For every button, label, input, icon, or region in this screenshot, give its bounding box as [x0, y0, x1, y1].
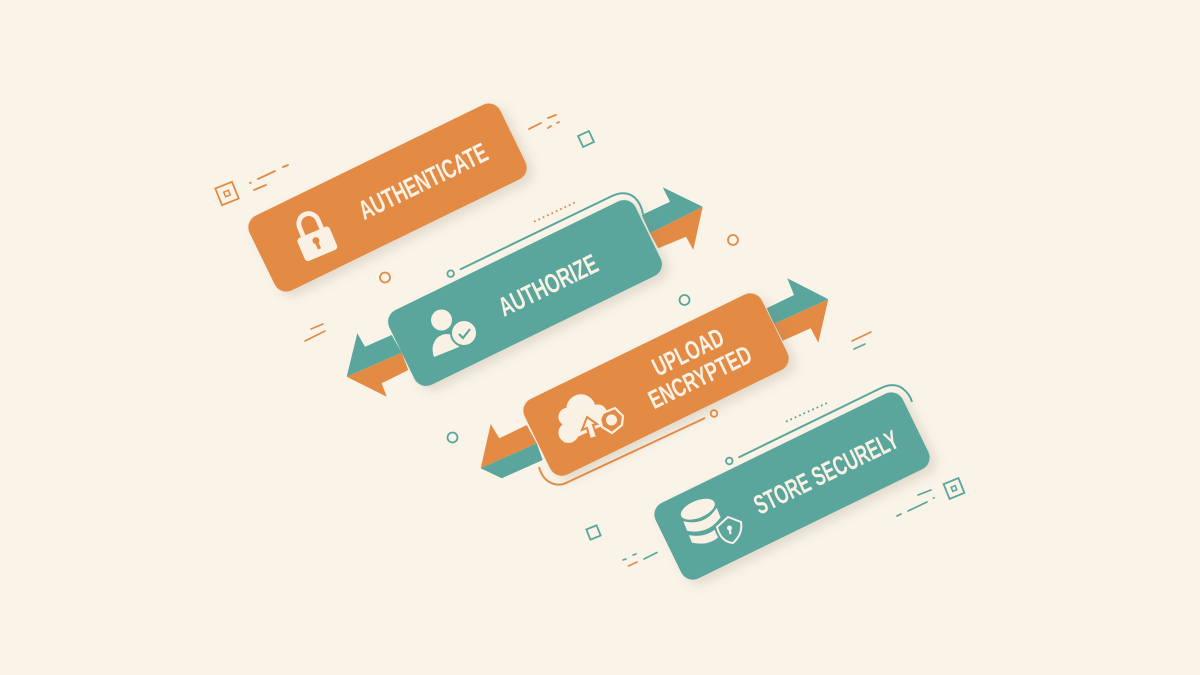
connector node	[447, 270, 454, 277]
icon: padlock	[289, 208, 338, 262]
decoration: top-right square	[578, 131, 594, 147]
step 4: store securely	[650, 385, 934, 584]
panel body	[519, 289, 793, 480]
decoration: top-left square and dashes	[215, 165, 288, 205]
decoration: lower-left dashes	[623, 552, 657, 566]
arrow: authorize left	[347, 333, 408, 397]
decoration: lower-right square and dashes	[897, 478, 964, 516]
step 2: authorize	[347, 187, 703, 397]
label: upload: UPLOAD	[647, 322, 729, 382]
panel body	[384, 196, 666, 390]
label: store securely: STORE SECURELY	[749, 425, 903, 520]
connector node	[711, 410, 717, 417]
label: authenticate: AUTHENTICATE	[354, 137, 493, 226]
decoration: orange ring right	[728, 235, 738, 245]
decoration: orange ring left	[380, 272, 390, 282]
decoration: right dashes	[852, 332, 871, 349]
label: authorize: AUTHORIZE	[494, 249, 603, 322]
connector node	[726, 458, 733, 464]
icon: database with shield	[678, 494, 741, 548]
dotted accent	[786, 403, 827, 422]
connector line	[738, 385, 912, 458]
label: encrypted: ENCRYPTED	[644, 339, 756, 415]
icon: cloud with arrow and shield	[558, 394, 623, 443]
dotted accent	[534, 202, 576, 222]
panel body	[650, 388, 934, 584]
decoration: lower-left square	[586, 525, 601, 540]
decoration: left dashes	[305, 324, 325, 341]
panel body	[244, 99, 531, 296]
arrow: upload left	[481, 424, 543, 478]
decoration: teal ring upper	[680, 295, 690, 305]
arrow: authorize right	[642, 187, 703, 250]
connector line	[460, 193, 643, 270]
step 3: upload encrypted	[481, 278, 828, 485]
icon: user with check	[431, 310, 477, 357]
arrow: upload right	[767, 278, 828, 343]
connector line	[539, 418, 705, 485]
decoration: teal ring lower	[448, 432, 458, 442]
step 1: authenticate	[244, 99, 531, 296]
decoration: top-right dashes	[529, 115, 559, 129]
